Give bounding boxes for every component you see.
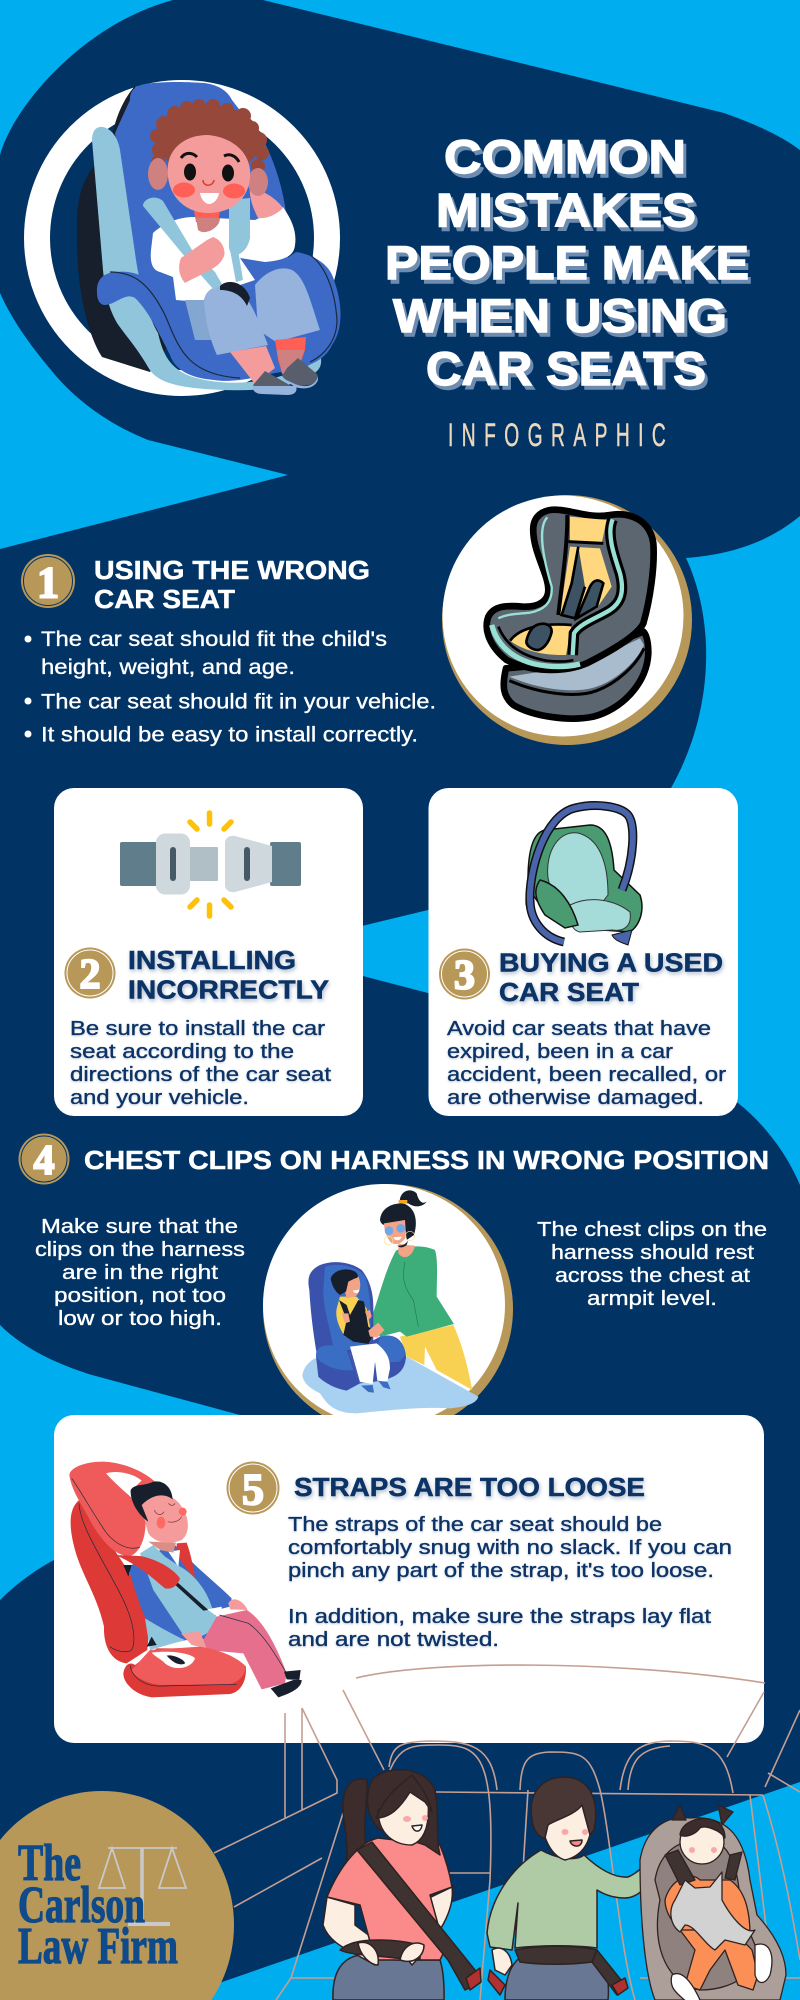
illustration: parent buckling child [263, 1184, 513, 1434]
section 2 text: and your vehicle. [70, 1087, 249, 1109]
firm name: Carlson [18, 1877, 145, 1934]
girl ponytail [343, 1779, 370, 1885]
baby top [665, 1876, 750, 1935]
icon: seat belt buckle [120, 813, 301, 916]
seat headrest [69, 1462, 157, 1556]
neck [398, 1243, 415, 1257]
section 4 number badge [18, 1134, 70, 1184]
section 4 right text: harness should rest [551, 1242, 755, 1264]
section 4 left text [35, 1216, 245, 1330]
section 5 text: and are not twisted. [288, 1629, 499, 1651]
section 3 number badge: 3 [454, 953, 475, 999]
yellow head panel [570, 517, 607, 543]
icon: scales of justice [99, 1848, 186, 1925]
section 5 text: pinch any part of the strap, it's too loose. [288, 1560, 714, 1582]
buckle [220, 282, 250, 306]
seat shell dark [77, 86, 200, 372]
firm name: Law Firm [18, 1918, 178, 1975]
boy hand on lap [492, 1948, 512, 1975]
firm name [18, 1835, 178, 1975]
hair [131, 1481, 173, 1522]
mother face [384, 1220, 406, 1244]
seat cushion blue [97, 252, 341, 381]
section 4 right text [537, 1219, 767, 1310]
straps [143, 198, 222, 290]
dark strap [123, 1565, 132, 1577]
seat pan [497, 615, 577, 657]
child top [336, 1297, 370, 1337]
illustration: sleeping child in red seat [69, 1462, 302, 1697]
section 2 heading: INCORRECTLY [128, 974, 329, 1004]
title: WHEN USING [393, 289, 727, 342]
seat back blue [115, 82, 296, 340]
section 5 text: In addition, make sure the straps lay flat [288, 1606, 712, 1628]
girl hair back [367, 1770, 440, 1855]
section 3 heading: CAR SEAT [499, 977, 639, 1007]
seat back [308, 1262, 373, 1353]
section 4 heading: CHEST CLIPS ON HARNESS IN WRONG POSITION [84, 1145, 769, 1175]
hands [228, 1599, 248, 1610]
section 3 text: are otherwise damaged. [447, 1087, 704, 1109]
smile [393, 1237, 402, 1240]
seat side light blue [92, 127, 321, 390]
section 3 text: expired, been in a car [447, 1041, 673, 1063]
harness pads [665, 1850, 695, 1885]
ponytail [400, 1190, 427, 1206]
girl hands [358, 1942, 378, 1965]
boy legs [505, 1948, 608, 2000]
shoes [282, 358, 317, 386]
green top [370, 1246, 454, 1337]
section 2 text: Be sure to install the car [70, 1018, 325, 1040]
child trousers [350, 1343, 390, 1384]
boy hair [531, 1777, 596, 1838]
section 5 number badge [226, 1462, 280, 1514]
section 3 text: Avoid car seats that have [447, 1018, 711, 1040]
section 2 heading [128, 945, 329, 1004]
title [385, 130, 749, 395]
section 1 heading: CAR SEAT [94, 584, 235, 614]
section 3 text [447, 1018, 726, 1109]
section 2 heading: INSTALLING [128, 945, 296, 975]
section 1 bullet list: It should be easy to install correctly. [41, 724, 418, 746]
section 1 bullet list: The car seat should fit in your vehicle. [41, 690, 436, 714]
cheeks [173, 182, 195, 198]
section 2 number badge [64, 948, 116, 998]
boy hand on baby [654, 1822, 678, 1860]
child trousers inner [185, 300, 215, 340]
seat back [71, 1499, 150, 1663]
boy shirt [487, 1848, 662, 1950]
baby seat [640, 1818, 786, 2000]
section 5 number badge: 5 [242, 1465, 264, 1514]
girl face [378, 1790, 428, 1845]
title: CAR SEATS [426, 342, 706, 395]
section 5 text [288, 1514, 732, 1651]
boy cheeks and mouth [562, 1829, 568, 1835]
baby head [680, 1820, 724, 1864]
title: PEOPLE MAKE [385, 236, 749, 289]
section 3 heading: BUYING A USED [499, 948, 723, 978]
title: COMMON [444, 130, 686, 183]
section 2 text [70, 1018, 332, 1109]
ears [148, 158, 168, 190]
girl legs [333, 1955, 444, 2000]
panel: installing incorrectly [54, 788, 363, 1116]
section 1 number badge: 1 [37, 558, 59, 607]
hero: white ring and child in car seat [37, 82, 341, 395]
seat base [123, 1648, 246, 1697]
yellow trousers [400, 1325, 472, 1390]
section 4 left text: clips on the harness [35, 1239, 245, 1261]
neck [148, 1542, 176, 1553]
girl bangs [376, 1775, 432, 1818]
icon: infant carrier [528, 806, 642, 945]
section 1 bullet list: height, weight, and age. [41, 656, 295, 679]
section 1 bullet list: The car seat should fit the child's [41, 628, 387, 651]
collar [177, 1543, 195, 1577]
section 4 right text: armpit level. [587, 1288, 717, 1310]
seat base [316, 1350, 360, 1391]
baby shoes [671, 1974, 700, 2000]
curly hair [150, 99, 269, 175]
section 3 heading [499, 948, 723, 1007]
title: MISTAKES [436, 184, 696, 236]
nose [203, 180, 214, 185]
panel: buying a used car seat [428, 788, 738, 1116]
right sock and lower leg [275, 337, 306, 375]
neck [194, 211, 220, 226]
section 2 text: directions of the car seat [70, 1064, 332, 1086]
hand [179, 237, 225, 283]
section 5 text: The straps of the car seat should be [288, 1514, 662, 1536]
baby hair tufts [672, 1805, 686, 1820]
section 2 number badge: 2 [80, 952, 100, 998]
section 4 left text: are in the right [62, 1262, 219, 1284]
illustration: girl with seat belt [323, 1770, 481, 2000]
harness [339, 1300, 375, 1344]
section 1 heading [94, 555, 370, 614]
illustration: baby in car seat [640, 1805, 786, 2000]
cat toy [671, 1872, 755, 1950]
left lower leg [230, 346, 275, 384]
logo: gold circle with firm name and scales [0, 1791, 234, 2000]
section 4 left text: low or too high. [58, 1308, 222, 1330]
child head [342, 1277, 360, 1298]
girl arms [323, 1897, 382, 1965]
trousers [203, 1610, 287, 1689]
section 4 left text: Make sure that the [41, 1216, 238, 1238]
child shoes [361, 1385, 374, 1393]
earrings [384, 1236, 393, 1245]
mint trims [573, 519, 622, 655]
shoulder straps [562, 547, 585, 618]
right leg [255, 268, 320, 342]
child shirt [151, 207, 295, 302]
illustration: boy in green shirt [487, 1777, 678, 2000]
shoes [284, 1670, 301, 1680]
mother hair [380, 1204, 416, 1240]
floor [302, 1357, 478, 1413]
section 5 heading: STRAPS ARE TOO LOOSE [294, 1472, 645, 1502]
section 3 text: accident, been recalled, or [447, 1064, 726, 1086]
baby trousers [680, 1927, 758, 1990]
panel: straps are too loose [54, 1415, 764, 1743]
subtitle: INFOGRAPHIC [448, 417, 666, 453]
icon: car seat in circle [442, 495, 692, 745]
boy belt [515, 1946, 597, 1964]
seat hole [152, 1652, 195, 1668]
firm name: The [18, 1835, 81, 1892]
car interior line drawing [214, 1665, 800, 2000]
section 1 heading: USING THE WRONG [94, 555, 370, 585]
section 4 left text: position, not too [54, 1285, 226, 1307]
glasses [385, 1226, 393, 1235]
child hands [342, 1313, 350, 1323]
raised arm [250, 187, 283, 218]
mouth [200, 193, 219, 204]
section 3 number badge [439, 948, 490, 1000]
section 5 text: comfortably snug with no slack. If you can [288, 1537, 732, 1559]
girl belt [357, 1842, 480, 1990]
boy face [540, 1805, 592, 1860]
eyes [184, 164, 196, 180]
section 4 right text: The chest clips on the [537, 1219, 767, 1241]
section 4 number badge: 4 [34, 1138, 54, 1184]
head [142, 1495, 188, 1543]
section 2 text: seat according to the [70, 1041, 294, 1063]
section 4 right text: across the chest at [555, 1265, 750, 1287]
girl shirt [327, 1838, 452, 1960]
left leg [204, 286, 268, 355]
section 1 bullet list [24, 628, 436, 746]
adult hands [368, 1323, 384, 1337]
strap pad [115, 1555, 180, 1589]
face [168, 135, 250, 213]
section 1 number badge [21, 554, 75, 608]
shirt and jacket [128, 1543, 232, 1647]
